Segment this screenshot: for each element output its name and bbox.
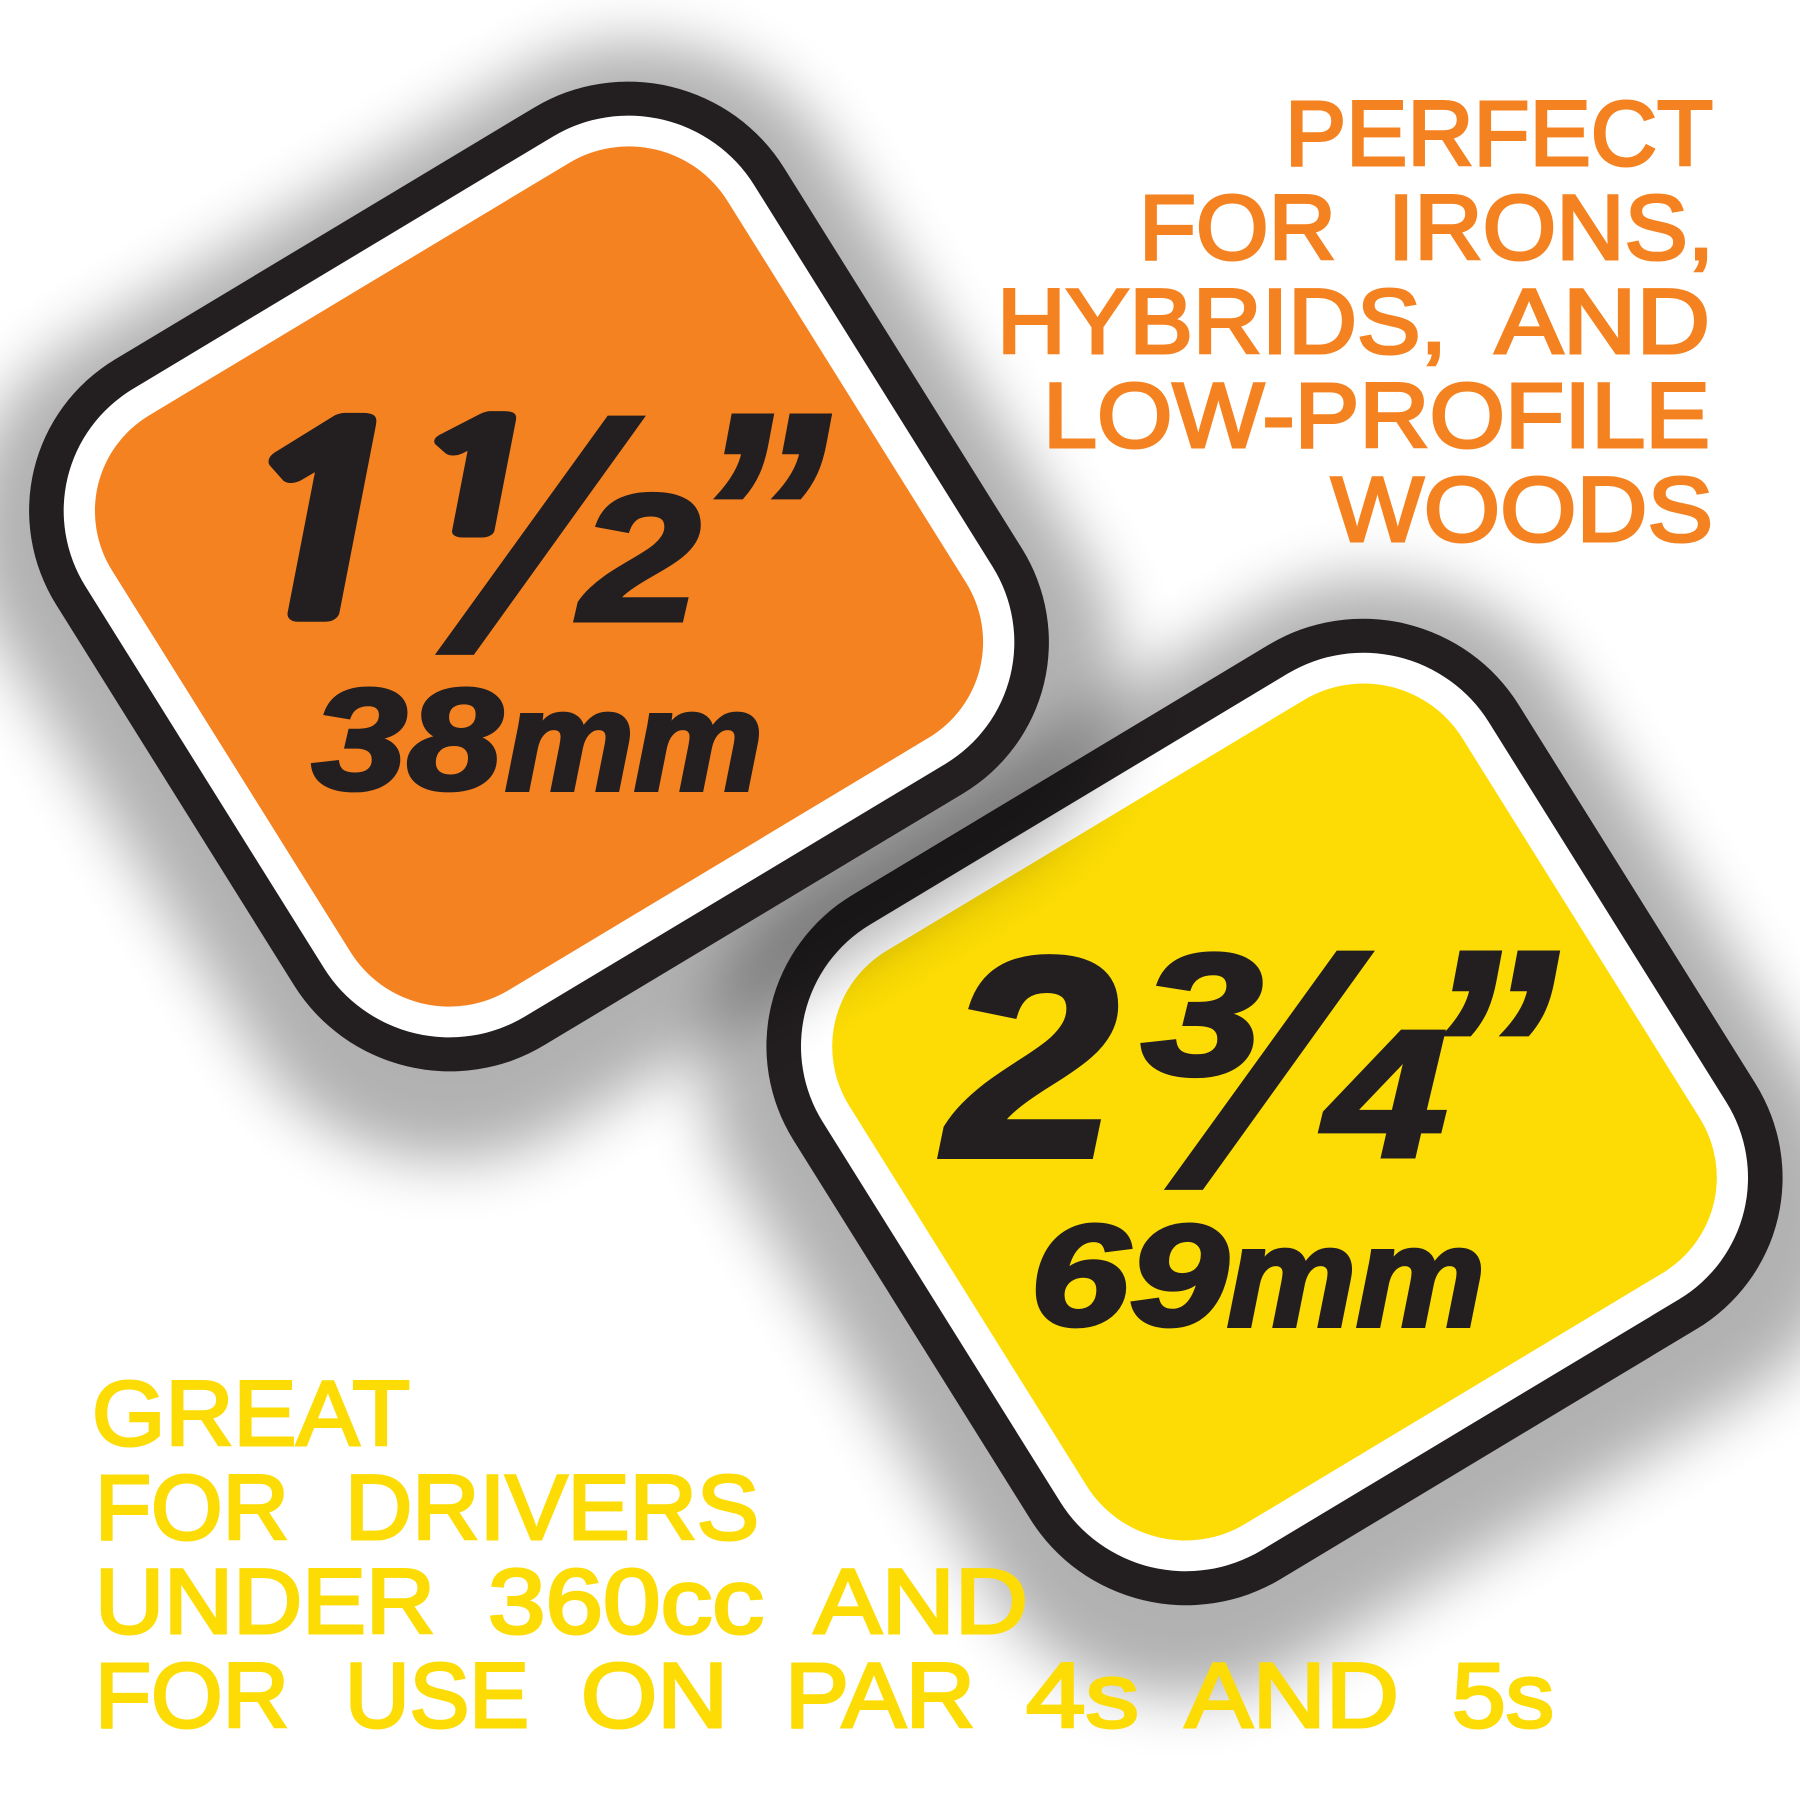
size label: 1 1/2 inch: [195, 353, 830, 716]
size label: 1 1/2 inch: /: [400, 360, 679, 716]
text block: perfect for irons: LOW-PROFILE: [1043, 365, 1710, 467]
text block: great for drivers: FOR: [95, 1457, 289, 1559]
text block: great for drivers: PAR: [785, 1645, 975, 1747]
metric label: 69mm: [1030, 1195, 1485, 1357]
text block: great for drivers: AND: [814, 1551, 1028, 1653]
badge: 2 3/4 inch yellow: [698, 552, 1800, 1672]
text block: great for drivers: 360cc: [488, 1551, 764, 1653]
size label: 1 1/2 inch: 2: [576, 458, 700, 659]
text block: perfect for irons: PERFECT: [1285, 83, 1713, 185]
badge: 1 1/2 inch orange: [0, 15, 1117, 1138]
metric label: 69mm: mm: [1227, 1198, 1485, 1357]
text block: great for drivers: GREAT: [92, 1363, 410, 1465]
text block: perfect for irons: HYBRIDS,: [997, 271, 1447, 373]
metric label: 38mm: [312, 659, 763, 821]
text block: great for drivers: FOR: [95, 1645, 289, 1747]
metric label: 38mm: mm: [505, 662, 763, 821]
text block: perfect for irons: AND: [1495, 271, 1710, 373]
metric label: 69mm: 69: [1030, 1195, 1228, 1356]
text block: great for drivers: DRIVERS: [345, 1457, 759, 1559]
text block: great for drivers: USE: [345, 1645, 529, 1747]
text block: perfect for irons: IRONS,: [1388, 177, 1714, 279]
text block: great for drivers: 5s: [1452, 1645, 1554, 1747]
size label: 2 3/4 inch: 3: [1142, 919, 1262, 1111]
size label: 1 1/2 inch: 1: [195, 397, 450, 654]
text block: great for drivers: [92, 1363, 1554, 1747]
text block: perfect for irons: WOODS: [1331, 459, 1713, 561]
size label: 2 3/4 inch: ”: [1420, 890, 1558, 1214]
shadow: orange badge: [0, 0, 1203, 1243]
size label: 2 3/4 inch: /: [1129, 895, 1408, 1251]
size label: 1 1/2 inch: ”: [692, 353, 830, 677]
text block: great for drivers: ON: [581, 1645, 728, 1747]
text block: perfect for irons: FOR: [1139, 177, 1336, 279]
size label: 2 3/4 inch: 2: [942, 900, 1117, 1215]
size label: 1 1/2 inch: 1: [388, 404, 567, 556]
text block: great for drivers: UNDER: [95, 1551, 435, 1653]
text block: perfect for irons: [997, 83, 1714, 561]
text block: great for drivers: AND: [1185, 1645, 1399, 1747]
shadow: yellow badge: [619, 496, 1800, 1779]
size label: 2 3/4 inch: [942, 890, 1558, 1251]
metric label: 38mm: 38: [312, 659, 502, 820]
text block: great for drivers: 4s: [1026, 1645, 1139, 1747]
size label: 2 3/4 inch: 4: [1321, 994, 1447, 1195]
